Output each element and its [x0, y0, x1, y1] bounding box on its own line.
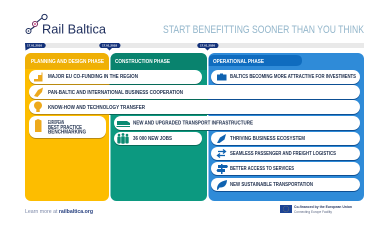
facility text: Connecting Europe Facility: [294, 210, 332, 214]
icon: people: [117, 133, 129, 144]
panel: construction phase: [110, 53, 207, 201]
row: new jobs: 36 000 NEW JOBS: [133, 136, 173, 142]
row: new sustainable transportation: [211, 178, 360, 192]
planning phase header: [25, 53, 109, 69]
row: new and upgraded transport infrastructure: [114, 116, 360, 131]
row: Baltics more attractive for investments: [211, 70, 360, 85]
timeline flag: start of planning: [25, 43, 46, 50]
row: major EU co-funding: MAJOR EU CO-FUNDING IN THE REGION: [48, 74, 138, 80]
EU co-financing credit: [280, 205, 352, 214]
operational phase heading: OPERATIONAL PHASE: [213, 59, 264, 65]
timeline flag: start of construction: [99, 43, 120, 50]
co-financed text: Co-financed by the European Union: [294, 205, 352, 209]
card: European best practice benchmarking: [29, 116, 106, 139]
icon: document: [35, 119, 42, 132]
timeline flag: start of construction: 17.01.2018: [102, 44, 117, 48]
icon: rail network nodes: [26, 14, 47, 34]
row: new sustainable transportation: NEW SUSTAINABLE TRANSPORTATION: [230, 182, 313, 188]
card: European best practice benchmarking: BEST PRACTICE: [48, 125, 83, 131]
logo wordmark: Rail Baltica: [42, 22, 107, 36]
icon: handshake: [34, 88, 43, 97]
row: know-how transfer: [29, 100, 360, 115]
row: thriving business ecosystem: [211, 132, 360, 146]
icon: light bulb: [34, 102, 42, 112]
row: Baltics more attractive for investments: BALTICS BECOMING MORE ATTRACTIVE FOR INVESTMENTS: [230, 74, 357, 80]
footer link: Learn more at railbaltica.org: [25, 209, 94, 215]
timeline flag: start of planning: 17.01.2016: [27, 44, 42, 48]
operational phase header: [208, 55, 302, 66]
icon: EU flag: [280, 205, 292, 213]
row: pan-Baltic cooperation: [29, 85, 360, 100]
row: seamless passenger and freight logistics: [211, 147, 360, 161]
row: seamless passenger and freight logistics: SEAMLESS PASSENGER AND FREIGHT LOGISTICS: [230, 151, 337, 157]
row: know-how transfer: KNOW-HOW AND TECHNOLOGY TRANSFER: [48, 105, 145, 111]
planning phase heading: PLANNING AND DESIGN PHASE: [31, 59, 104, 65]
row: new jobs: [114, 132, 202, 146]
icon: exchange arrows: [218, 150, 226, 158]
row: major EU co-funding: [29, 70, 202, 85]
timeline: [25, 43, 364, 50]
logo: [26, 14, 107, 36]
icon: coins: [34, 72, 42, 82]
row: pan-Baltic cooperation: PAN-BALTIC AND INTERNATIONAL BUSINESS COOPERATION: [48, 90, 183, 96]
icon: briefcase: [217, 74, 226, 80]
icon: train: [116, 121, 130, 127]
timeline flag: start of operation: 17.01.2026: [200, 44, 215, 48]
construction phase heading: CONSTRUCTION PHASE: [115, 59, 170, 65]
row: better access to services: [211, 162, 360, 176]
row: better access to services: BETTER ACCESS TO SERVICES: [230, 166, 295, 172]
panel: planning and design phase: [25, 53, 109, 201]
panel: operational phase: [208, 53, 364, 201]
timeline flag: start of operation: [197, 43, 218, 50]
icon: rocket: [217, 134, 226, 143]
icon: leaf: [217, 180, 227, 190]
row: new and upgraded transport infrastructure: NEW AND UPGRADED TRANSPORT INFRASTRUCTURE: [133, 120, 254, 126]
icon: signpost: [216, 164, 228, 174]
row: thriving business ecosystem: THRIVING BUSINESS ECOSYSTEM: [230, 136, 305, 142]
card: European best practice benchmarking: EUROPEAN: [48, 120, 64, 126]
card: European best practice benchmarking: BENCHMARKING: [48, 129, 86, 135]
construction phase header: [110, 53, 207, 70]
